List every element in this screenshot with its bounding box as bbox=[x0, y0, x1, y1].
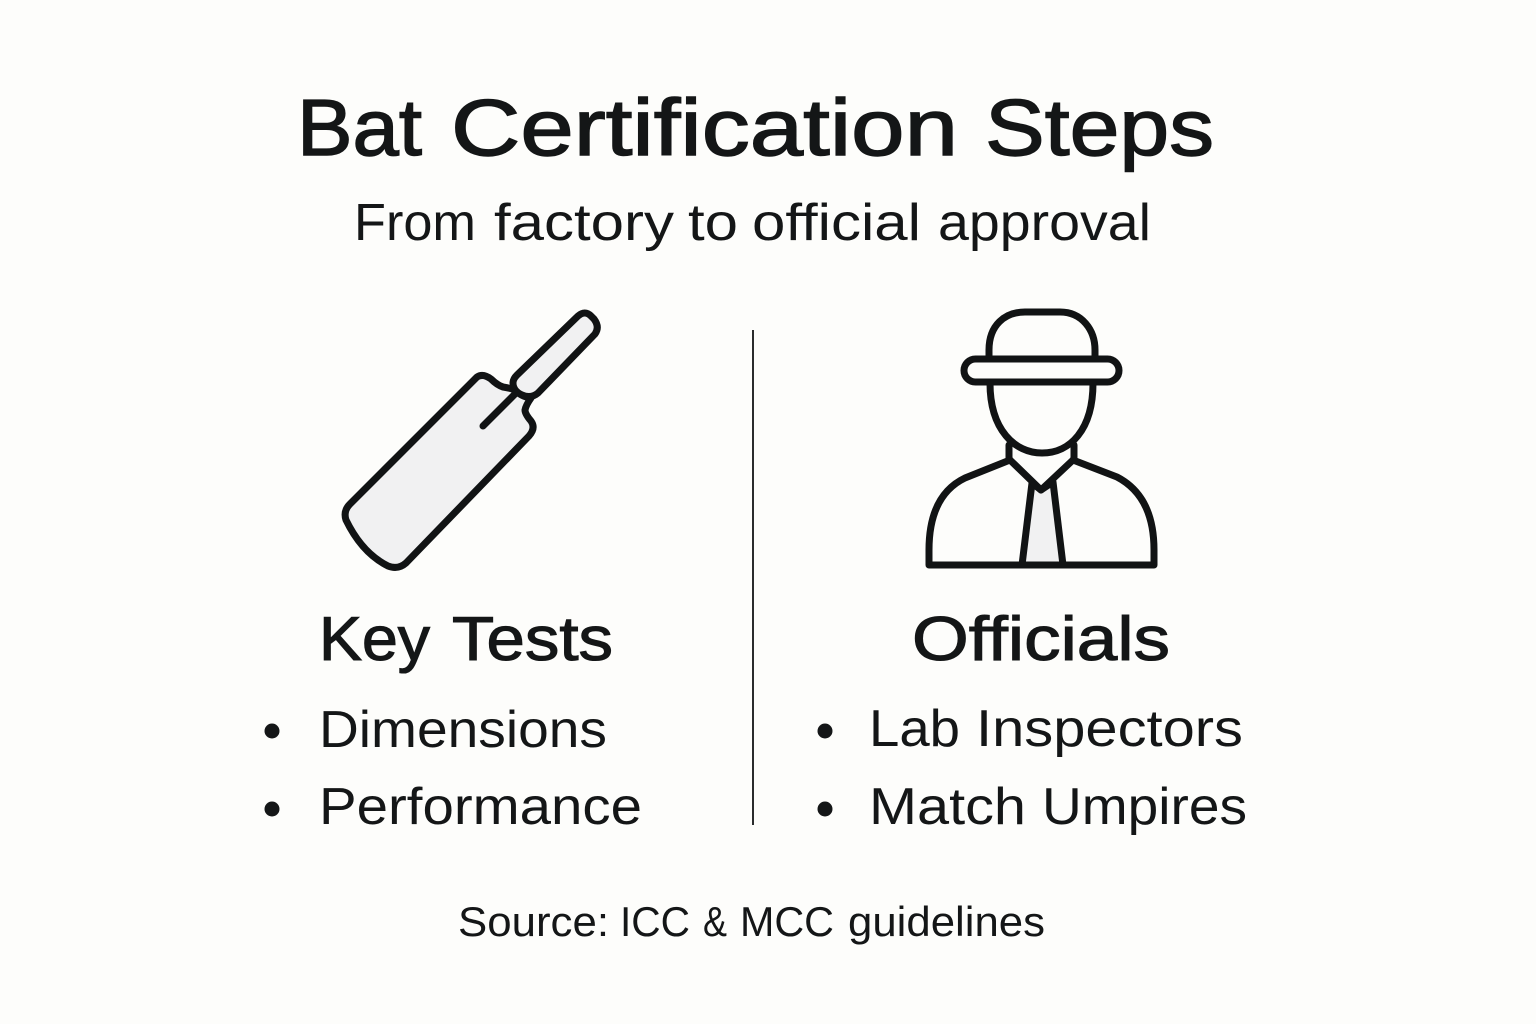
title: Steps bbox=[985, 83, 1214, 172]
list: officials: Inspectors bbox=[976, 700, 1243, 758]
heading: officials: Officials bbox=[912, 605, 1170, 674]
source note: MCC bbox=[740, 898, 834, 945]
list: tests: Performance bbox=[319, 778, 642, 836]
subtitle: factory bbox=[494, 194, 674, 252]
list: officials: Match bbox=[869, 778, 1026, 836]
list: officials bbox=[818, 700, 1247, 836]
list: officials: Umpires bbox=[1042, 778, 1247, 836]
title: Certification bbox=[451, 83, 958, 172]
subtitle: From bbox=[354, 194, 476, 252]
icon: cricket bat bbox=[345, 313, 597, 567]
icon: match official bbox=[929, 312, 1154, 565]
title: Bat bbox=[297, 83, 422, 172]
list: tests: Dimensions bbox=[319, 701, 607, 759]
source note bbox=[458, 898, 1045, 945]
panel: officials bbox=[818, 605, 1247, 836]
source note: guidelines bbox=[848, 898, 1045, 945]
heading: key tests: Key bbox=[319, 605, 430, 674]
title bbox=[297, 83, 1214, 172]
list: tests bbox=[264, 701, 642, 836]
list: officials: Lab bbox=[869, 700, 960, 758]
subtitle: approval bbox=[938, 194, 1151, 252]
heading: key tests: Tests bbox=[452, 605, 613, 674]
divider bbox=[752, 330, 754, 825]
source note: Source: bbox=[458, 898, 609, 945]
source note: & bbox=[703, 898, 727, 945]
panel: key tests bbox=[264, 605, 642, 836]
source note: ICC bbox=[620, 898, 690, 945]
subtitle: to bbox=[688, 194, 738, 252]
subtitle: official bbox=[752, 194, 921, 252]
subtitle bbox=[354, 194, 1151, 252]
heading: key tests bbox=[319, 605, 613, 674]
